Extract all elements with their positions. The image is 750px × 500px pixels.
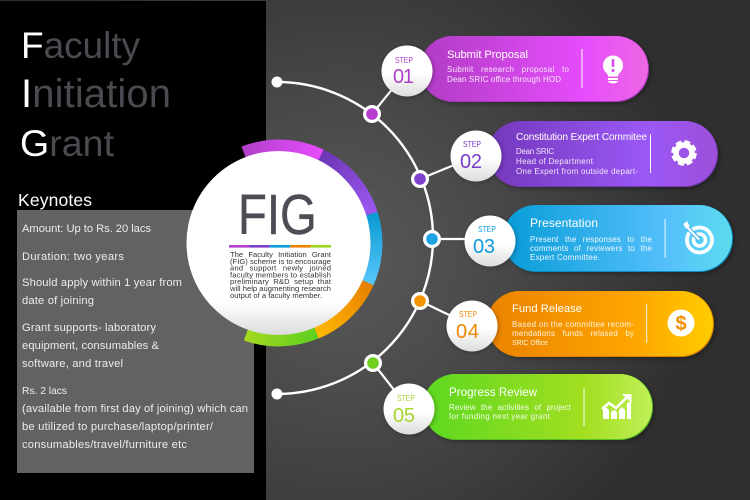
step badge 02 (450, 130, 502, 182)
node 1 (363, 105, 381, 123)
title: Faculty Initiation Grant: Initiation (21, 72, 171, 116)
step 2 description (516, 147, 638, 176)
panel: left black sidebar (0, 1, 266, 500)
FIG description: and support newly joined (230, 264, 331, 273)
keynotes text: Duration: two years (22, 251, 124, 263)
keynotes text: Grant supports- laboratory (22, 322, 156, 334)
panel: step 4 Fund Release (487, 291, 714, 357)
keynotes text: (available from first day of joining) which can (22, 403, 248, 415)
step 4 description: mendations funds relased by (512, 329, 634, 338)
panel: keynotes box (17, 210, 254, 473)
FIG description: The Faculty Initiation Grant (230, 250, 332, 259)
icon: gear (674, 142, 694, 164)
node 5 (364, 354, 382, 372)
step badge 04 (446, 300, 498, 352)
step badge 03: STEP (478, 224, 496, 234)
FIG heading: FIG (238, 184, 317, 247)
panel: step 2 Constitution Expert Commitee (488, 121, 718, 187)
icon: growth chart (602, 394, 632, 419)
step 2 title: Constitution Expert Commitee (516, 132, 647, 143)
keynotes text: Should apply within 1 year from (22, 277, 182, 289)
FIG description: faculty members to establish (230, 270, 331, 279)
keynotes text: consumables/travel/furniture etc (22, 439, 187, 451)
FIG description (229, 250, 332, 300)
keynotes text: software, and travel (22, 358, 123, 370)
icon: light bulb (603, 56, 623, 84)
FIG description: will help augmenting research (229, 284, 331, 293)
step badge 04: 04 (456, 321, 479, 343)
timeline arc (277, 82, 433, 394)
step badge 05: STEP (397, 393, 415, 403)
step 2 description: Head of Department (516, 157, 594, 166)
step 5 description: for funding next year grant (449, 412, 551, 421)
step badge 02: 02 (460, 151, 482, 173)
title: Faculty Initiation Grant: Grant (20, 122, 115, 164)
title: Faculty Initiation Grant: Faculty (21, 25, 140, 66)
keynotes text: Amount: Up to Rs. 20 lacs (22, 223, 151, 235)
step 3 description: Present the responses to the (530, 235, 653, 244)
keynotes text: be utilized to purchase/laptop/printer/ (22, 421, 214, 433)
keynotes text: date of joining (22, 295, 94, 307)
step 5 description (449, 403, 572, 421)
step 5 title: Progress Review (449, 387, 538, 399)
FIG description: (FIG) scheme is to encourage (230, 257, 331, 266)
step badge 03 (464, 216, 516, 266)
icon: target (684, 222, 712, 252)
step badge 03: 03 (473, 236, 495, 258)
panel: step 3 Presentation (503, 205, 733, 272)
panel: step 5 Progress Review (423, 374, 653, 440)
keynotes text: Rs. 2 lacs (22, 386, 67, 397)
step 3 title: Presentation (530, 216, 598, 230)
node 4 (411, 292, 429, 310)
step badge 01 (382, 46, 432, 96)
step 1 description: Submit research proposal to (447, 65, 570, 74)
step 1 description: Dean SRIC office through HOD (447, 75, 561, 84)
heading: Keynotes: Keynotes (18, 190, 92, 210)
step 4 description (512, 320, 634, 347)
arc end dots (272, 76, 282, 400)
step 3 description: Expert Committee. (530, 253, 600, 262)
icon: dollar coin (668, 310, 694, 336)
step 1 description (447, 65, 570, 84)
FIG description: output of a faculty member. (230, 291, 322, 300)
step 2 description: One Expert from outside depart- (516, 167, 638, 176)
step badge 05 (384, 384, 434, 434)
keynotes text: equipment, consumables & (22, 340, 160, 352)
title: Faculty Initiation Grant (20, 25, 171, 164)
step 3 description: comments of reviewers to the (530, 244, 653, 253)
step 1 title: Submit Proposal (447, 49, 528, 61)
step 4 description: Based on the committee recom- (512, 320, 634, 329)
connector lines from arc to steps (372, 71, 490, 409)
icon: dollar coin: $ (675, 313, 687, 335)
step 4 title: Fund Release (512, 303, 582, 315)
step badge 01: STEP (395, 55, 413, 65)
step 5 description: Review the activities of project (449, 403, 572, 412)
step 3 description (530, 235, 653, 262)
node 2 (411, 170, 429, 188)
five-colour rule (229, 245, 331, 248)
FIG description: preliminary R&D setup that (230, 277, 332, 286)
keynotes text (22, 223, 248, 451)
step 2 description: Dean SRIC (516, 147, 554, 156)
step badge 02: STEP (463, 139, 481, 149)
panel: step 1 Submit Proposal (420, 36, 649, 102)
central ring (244, 146, 376, 340)
step badge 05: 05 (393, 405, 415, 427)
step badge 04: STEP (459, 309, 477, 319)
step 4 description: SRIC Office (512, 340, 548, 347)
node 3 (423, 230, 441, 248)
step badge 01: 01 (393, 66, 414, 88)
central white disc (186, 151, 370, 335)
